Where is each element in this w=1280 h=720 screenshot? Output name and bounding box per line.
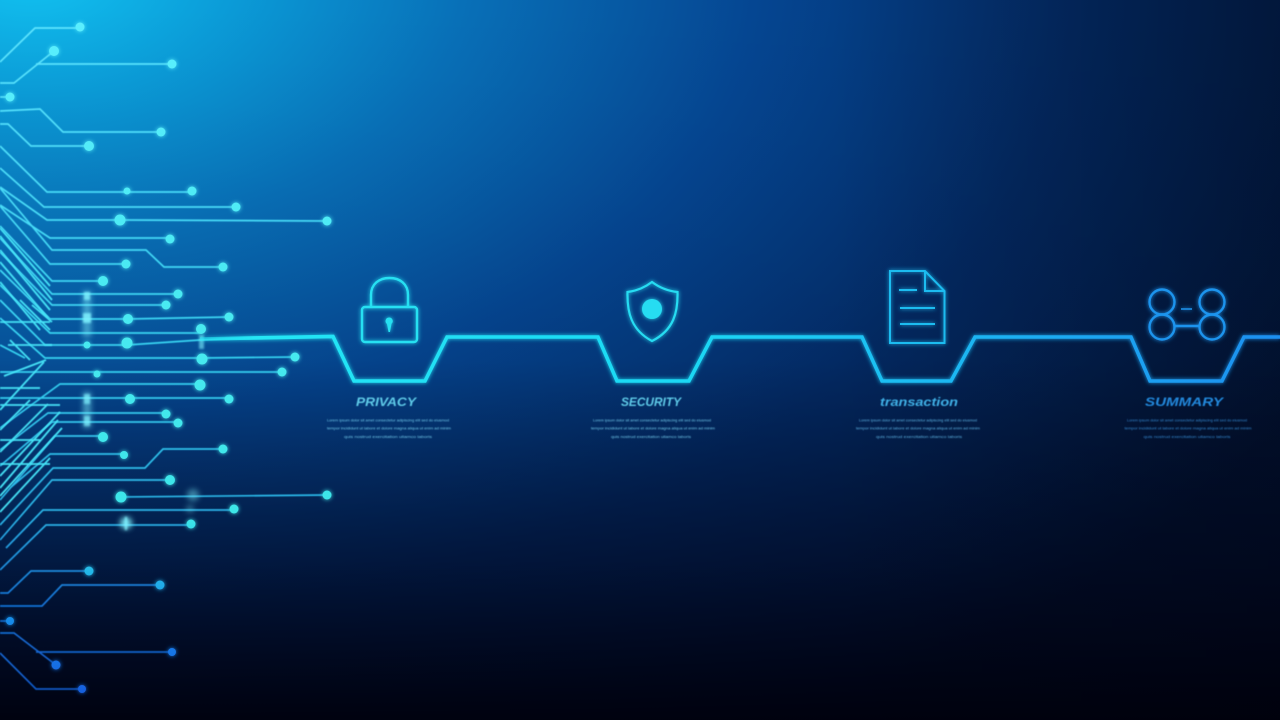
step 3 description: Lorem ipsum dolor sit amet consectetur adipiscing elit sed do eiusmod: [859, 418, 977, 422]
circuit terminal dots: [6, 22, 332, 693]
step 2 label: SECURITY: [621, 395, 682, 409]
icon: shield: [627, 282, 678, 341]
step 2 description: Lorem ipsum dolor sit amet consectetur adipiscing elit sed do eiusmod: [593, 418, 711, 422]
step 3 label: transaction: [880, 395, 958, 409]
step 2 description: tempor incididunt ut labore et dolore magna aliqua ut enim ad minim: [591, 426, 715, 430]
circuit core: bright diagonal lines: [0, 228, 62, 512]
step 4 label: [1124, 395, 1252, 439]
step 4 description: tempor incididunt ut labore et dolore magna aliqua ut enim ad minim: [1124, 426, 1252, 430]
step 3 description: [856, 418, 980, 439]
step 4 description: [1124, 418, 1252, 439]
step 1 label: PRIVACY: [356, 395, 417, 409]
step 1 label: [327, 395, 451, 439]
icon: network nodes: [1150, 290, 1224, 340]
timeline connector line: [200, 336, 1280, 381]
step 4 description: Lorem ipsum dolor sit amet consectetur adipiscing elit sed do eiusmod: [1127, 418, 1247, 422]
step 3 label: [856, 395, 980, 439]
step 2 description: [591, 418, 715, 439]
step 1 description: tempor incididunt ut labore et dolore magna aliqua ut enim ad minim: [327, 426, 451, 430]
icon: padlock: [362, 278, 417, 342]
icon: document: [890, 271, 944, 343]
step 1 description: Lorem ipsum dolor sit amet consectetur adipiscing elit sed do eiusmod: [327, 418, 449, 422]
step 4 label: SUMMARY: [1145, 395, 1224, 409]
step 2 label: [591, 395, 715, 439]
circuit board traces: [0, 28, 327, 689]
glowing light sparks: [83, 291, 204, 530]
step 1 description: [327, 418, 451, 439]
step 3 description: quis nostrud exercitation ullamco laboris: [876, 435, 962, 439]
step 1 description: quis nostrud exercitation ullamco laboris: [344, 435, 432, 439]
step 3 description: tempor incididunt ut labore et dolore magna aliqua ut enim ad minim: [856, 426, 980, 430]
step 4 description: quis nostrud exercitation ullamco laboris: [1144, 435, 1231, 439]
step 2 description: quis nostrud exercitation ullamco laboris: [611, 435, 691, 439]
